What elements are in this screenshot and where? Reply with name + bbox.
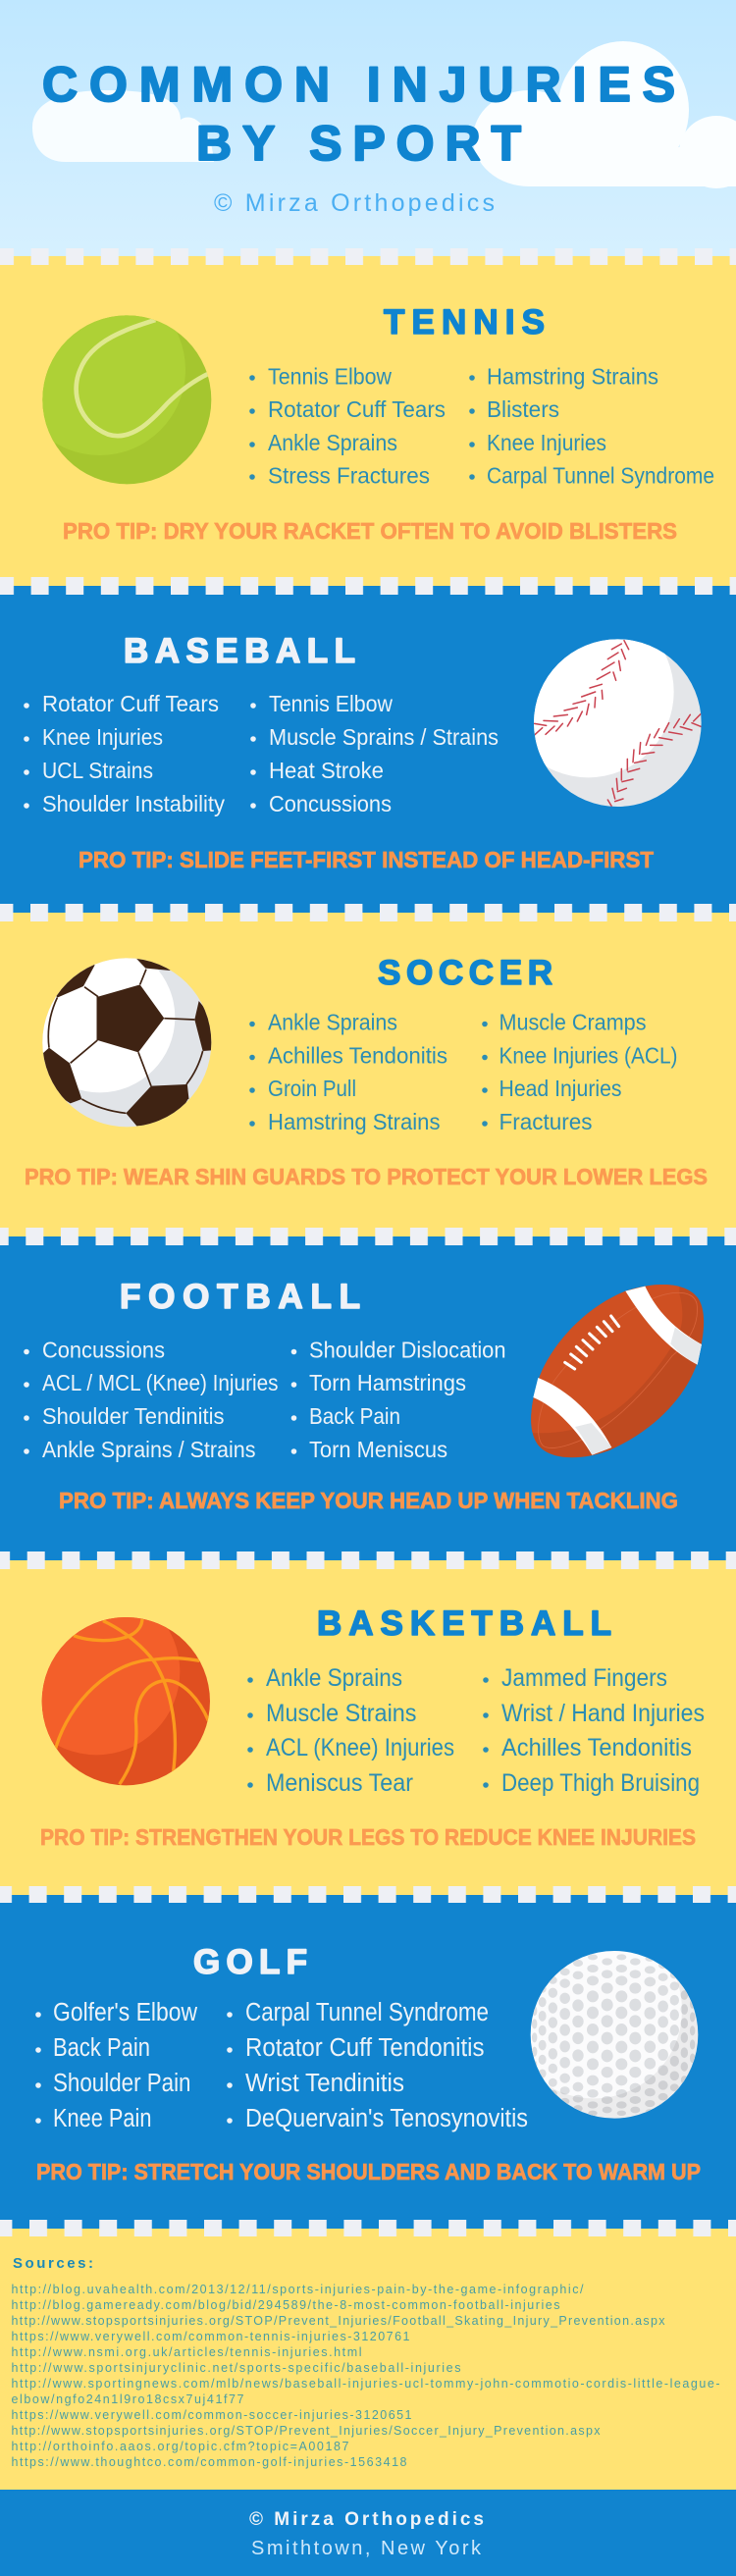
injury list: baseball: Knee Injuries (42, 724, 163, 750)
subtitle: © Mirza Orthopedics (214, 189, 495, 217)
injury list: football: Torn Meniscus (309, 1437, 447, 1462)
injury list: golf: DeQuervain's Tenosynovitis (245, 2105, 528, 2132)
injury list: baseball: Concussions (269, 791, 392, 816)
injury list: basketball: Wrist / Hand Injuries (501, 1700, 705, 1727)
source links: https://www.thoughtco.com/common-golf-injuries-1563418 (12, 2455, 407, 2469)
header panel (0, 0, 736, 257)
injury list: soccer: Hamstring Strains (268, 1109, 440, 1134)
pro tip: golf: PRO TIP: STRETCH YOUR SHOULDERS AND BACK TO WARM UP (36, 2159, 701, 2184)
footer organisation: © Mirza Orthopedics (249, 2509, 484, 2530)
cloud left (32, 90, 214, 162)
source links: http://www.sportsinjuryclinic.net/sports-specific/baseball-injuries (12, 2361, 460, 2375)
icon: football (531, 1285, 705, 1458)
source links: http://www.stopsportsinjuries.org/STOP/Prevent_Injuries/Football_Skating_Injury_Prevention.aspx (12, 2314, 665, 2328)
heading: football: FOOTBALL (120, 1278, 360, 1316)
injury list: football: Torn Hamstrings (309, 1370, 466, 1395)
injury list: golf: Rotator Cuff Tendonitis (245, 2034, 485, 2062)
source links: https://www.verywell.com/common-soccer-injuries-3120651 (12, 2408, 412, 2422)
panel: soccer (26, 958, 707, 1185)
title: BY SPORT (196, 116, 521, 171)
injury list: tennis: Hamstring Strains (487, 363, 658, 389)
injury list: soccer: Knee Injuries (ACL) (499, 1042, 677, 1068)
panel: baseball (0, 586, 736, 913)
panel: golf (0, 1895, 736, 2230)
injury list: tennis: Blisters (487, 396, 559, 422)
title: COMMON INJURIES (42, 57, 675, 112)
icon: golf ball (530, 1951, 699, 2119)
heading: sources: Sources: (13, 2255, 93, 2272)
injury list: soccer (249, 1009, 677, 1134)
injury list: football: Back Pain (309, 1403, 400, 1429)
injury list: soccer: Head Injuries (499, 1076, 622, 1101)
injury list: basketball: Deep Thigh Bruising (501, 1769, 700, 1797)
icon: basketball (41, 1617, 210, 1786)
icon: soccer ball (42, 958, 212, 1127)
injury list: tennis (249, 363, 714, 489)
source links: elbow/ngfo24n1l9ro18csx7uj41f77 (12, 2392, 244, 2406)
heading: golf: GOLF (193, 1943, 307, 1981)
source links (12, 2283, 720, 2469)
injury list: soccer: Achilles Tendonitis (268, 1042, 447, 1068)
pro tip: basketball: PRO TIP: STRENGTHEN YOUR LEGS TO REDUCE KNEE INJURIES (40, 1824, 696, 1850)
injury list: football: ACL / MCL (Knee) Injuries (42, 1370, 279, 1395)
pro tip: tennis: PRO TIP: DRY YOUR RACKET OFTEN TO AVOID BLISTERS (63, 518, 677, 544)
injury list: baseball: Shoulder Instability (42, 791, 225, 816)
panel: basketball (41, 1609, 705, 1845)
pro tip: football: PRO TIP: ALWAYS KEEP YOUR HEAD UP WHEN TACKLING (59, 1488, 678, 1513)
injury list: golf: Shoulder Pain (53, 2070, 190, 2097)
injury list: basketball: Ankle Sprains (266, 1664, 402, 1692)
injury list: golf: Golfer's Elbow (53, 1999, 198, 2026)
injury list: football: Concussions (42, 1337, 165, 1362)
source links: http://www.sportingnews.com/mlb/news/baseball-injuries-ucl-tommy-john-commotio-cordis-little-league- (12, 2377, 720, 2391)
title (42, 57, 675, 171)
pro tip: soccer: PRO TIP: WEAR SHIN GUARDS TO PROTECT YOUR LOWER LEGS (25, 1164, 708, 1189)
injury list: golf: Back Pain (53, 2034, 150, 2062)
injury list: baseball (24, 691, 499, 816)
injury list: football: Ankle Sprains / Strains (42, 1437, 255, 1462)
injury list: basketball: Achilles Tendonitis (501, 1734, 692, 1761)
panel: sources (0, 2229, 736, 2490)
heading: baseball: BASEBALL (124, 632, 355, 670)
panel: football (0, 1236, 736, 1560)
injury list: baseball: Heat Stroke (269, 758, 384, 783)
injury list: basketball: ACL (Knee) Injuries (266, 1734, 454, 1761)
injury list: basketball: Jammed Fingers (501, 1664, 667, 1692)
footer location: Smithtown, New York (251, 2538, 482, 2559)
injury list: basketball: Muscle Strains (266, 1700, 416, 1727)
injury list: football: Shoulder Tendinitis (42, 1403, 224, 1429)
heading: basketball: BASKETBALL (317, 1604, 611, 1643)
injury list: tennis: Knee Injuries (487, 430, 606, 455)
heading: soccer: SOCCER (378, 954, 552, 992)
injury list: soccer: Ankle Sprains (268, 1009, 397, 1034)
injury list: football (24, 1337, 505, 1462)
icon: baseball (534, 639, 702, 807)
pro tip: baseball: PRO TIP: SLIDE FEET-FIRST INSTEAD OF HEAD-FIRST (79, 847, 654, 872)
injury list: golf: Knee Pain (53, 2105, 151, 2132)
injury list: football: Shoulder Dislocation (309, 1337, 506, 1362)
injury list: soccer: Groin Pull (268, 1076, 356, 1101)
source links: http://orthoinfo.aaos.org/topic.cfm?topic=A00187 (12, 2440, 349, 2453)
injury list: basketball: Meniscus Tear (266, 1769, 413, 1797)
panel: tennis (14, 256, 730, 540)
injury list: soccer: Muscle Cramps (499, 1009, 646, 1034)
injury list: tennis: Carpal Tunnel Syndrome (487, 463, 714, 489)
source links: http://www.nsmi.org.uk/articles/tennis-injuries.html (12, 2345, 361, 2359)
injury list: baseball: UCL Strains (42, 758, 153, 783)
injury list: tennis: Stress Fractures (268, 463, 430, 489)
injury list: tennis: Tennis Elbow (268, 363, 393, 389)
source links: http://blog.gameready.com/blog/bid/294589/the-8-most-common-football-injuries (12, 2298, 560, 2312)
injury list: golf: Carpal Tunnel Syndrome (245, 1999, 489, 2026)
injury list: basketball (247, 1664, 705, 1797)
source links: http://www.stopsportsinjuries.org/STOP/Prevent_Injuries/Soccer_Injury_Prevention.aspx (12, 2424, 601, 2438)
injury list: golf: Wrist Tendinitis (245, 2070, 404, 2097)
injury list: tennis: Ankle Sprains (268, 430, 397, 455)
injury list: soccer: Fractures (499, 1109, 593, 1134)
panel: footer (0, 2490, 736, 2576)
injury list: tennis: Rotator Cuff Tears (268, 396, 446, 422)
injury list: golf (35, 1999, 528, 2132)
heading: tennis: TENNIS (384, 303, 545, 342)
cloud right (473, 41, 736, 188)
icon: tennis ball (42, 315, 212, 485)
injury list: baseball: Muscle Sprains / Strains (269, 724, 499, 750)
source links: http://blog.uvahealth.com/2013/12/11/sports-injuries-pain-by-the-game-infographic/ (12, 2283, 584, 2296)
source links: https://www.verywell.com/common-tennis-injuries-3120761 (12, 2330, 410, 2343)
injury list: baseball: Tennis Elbow (269, 691, 394, 716)
injury list: baseball: Rotator Cuff Tears (42, 691, 219, 716)
